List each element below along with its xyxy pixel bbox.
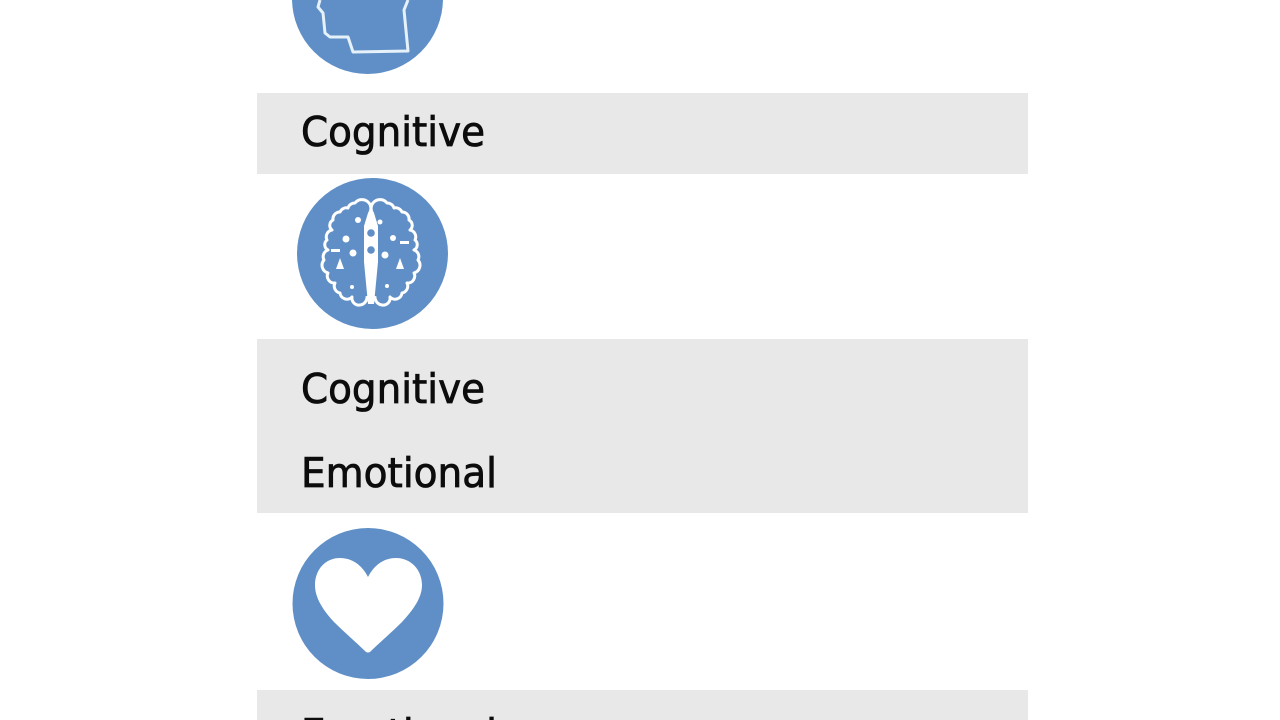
icon: head profile in blue circle <box>292 0 443 74</box>
band: Emotional (cut off) <box>257 690 1028 720</box>
icon: heart in blue circle <box>292 528 444 679</box>
band: Cognitive and Emotional: Emotional <box>301 449 497 497</box>
band: Cognitive and Emotional <box>257 339 1028 513</box>
icon: brain in blue circle <box>297 178 448 329</box>
band: Cognitive and Emotional: Cognitive <box>301 365 485 413</box>
band: Cognitive: Cognitive <box>301 108 485 156</box>
band: Cognitive <box>257 93 1028 174</box>
